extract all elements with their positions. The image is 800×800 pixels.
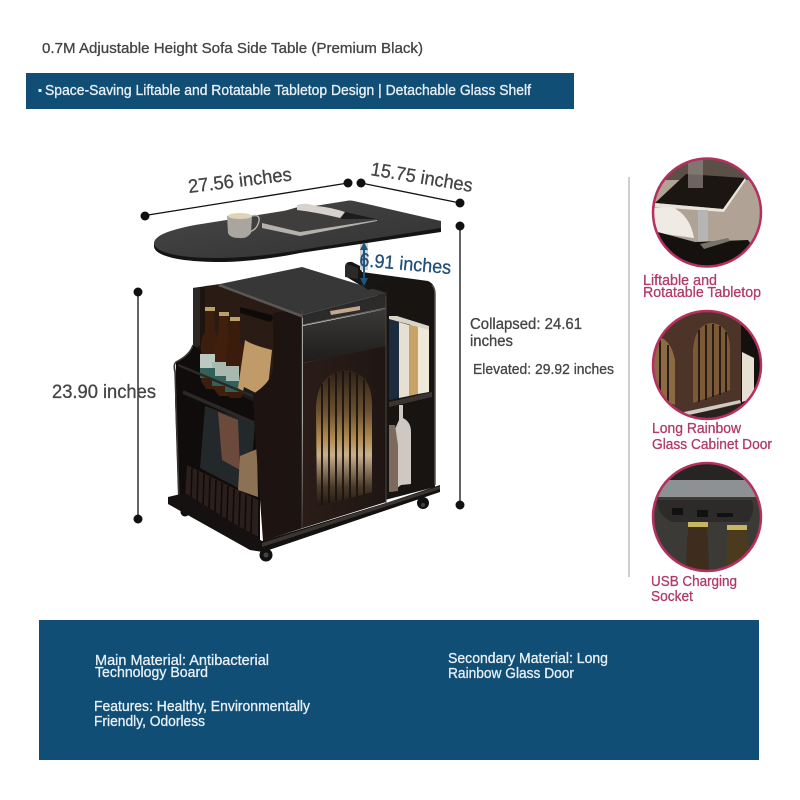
dimension: depth 15.75 inches: 15.75 inches — [369, 159, 474, 197]
glass cabinet door — [302, 296, 386, 528]
label — [643, 272, 761, 301]
label: Socket — [651, 588, 694, 605]
label — [652, 420, 772, 453]
text: elevated height: Elevated: 29.92 inches — [473, 361, 614, 378]
text: main material: Technology Board — [95, 664, 208, 681]
icon: tabletop photo circle — [652, 157, 762, 268]
dimension: width 27.56 inches — [140, 164, 352, 220]
side panel — [253, 309, 303, 541]
support pole — [354, 240, 392, 290]
text: collapsed height: inches — [470, 333, 513, 350]
label: USB Charging — [651, 573, 737, 590]
shelf rods — [178, 365, 255, 423]
open book — [260, 204, 377, 236]
dimension: body height 23.90 inches — [52, 288, 156, 524]
text: features: Friendly, Odorless — [94, 713, 205, 730]
feature: liftable tabletop — [643, 155, 770, 301]
divider — [628, 177, 630, 577]
banner: product highlights: Space-Saving Liftable and Rotatable Tabletop Design | Detachable Glass Shelf — [45, 83, 532, 99]
dimension: elevated height line — [456, 222, 464, 510]
text: collapsed height: Collapsed: 24.61 — [470, 316, 582, 333]
text: secondary material: Secondary Material: Long — [448, 650, 608, 667]
text: features — [94, 698, 310, 730]
icon: USB socket photo circle — [650, 460, 765, 575]
text: features: Features: Healthy, Environmentally — [94, 698, 310, 715]
base platform and casters — [168, 485, 440, 562]
feature: USB charging socket — [650, 460, 765, 605]
product illustration: side table — [154, 200, 441, 562]
magazine rack — [185, 406, 258, 537]
text: collapsed height — [470, 316, 582, 350]
right shelf section — [345, 262, 435, 500]
tabletop — [154, 200, 441, 262]
text: main material — [95, 652, 269, 681]
text: secondary material: Rainbow Glass Door — [448, 665, 574, 682]
banner: product highlights — [26, 73, 574, 109]
dimension: depth 15.75 inches — [356, 159, 474, 208]
label: Liftable and — [643, 272, 717, 289]
title: 0.7M Adjustable Height Sofa Side Table (Premium Black) — [42, 40, 423, 57]
label: Long Rainbow — [652, 420, 741, 437]
label: Glass Cabinet Door — [652, 436, 772, 453]
coffee cup — [227, 213, 259, 238]
left shelf back and frame — [174, 284, 300, 540]
icon: glass door photo circle — [650, 308, 765, 423]
text: secondary material — [448, 650, 608, 682]
label — [651, 573, 737, 605]
panel: material specifications — [39, 620, 759, 760]
dimension: lift 6.91 inches: 6.91 inches — [359, 250, 452, 279]
feature: rainbow glass door — [650, 308, 772, 453]
dimension: lift 6.91 inches — [359, 242, 452, 286]
dimension: width 27.56 inches: 27.56 inches — [187, 164, 293, 198]
label: Rotatable Tabletop — [643, 284, 761, 301]
beer bottles — [200, 307, 244, 398]
dimension: body height 23.90 inches: 23.90 inches — [52, 382, 156, 403]
text: main material: Main Material: Antibacterial — [95, 652, 269, 669]
kraft coffee bag — [238, 340, 272, 402]
drawer fronts — [303, 296, 386, 363]
cabinet top — [218, 267, 387, 323]
